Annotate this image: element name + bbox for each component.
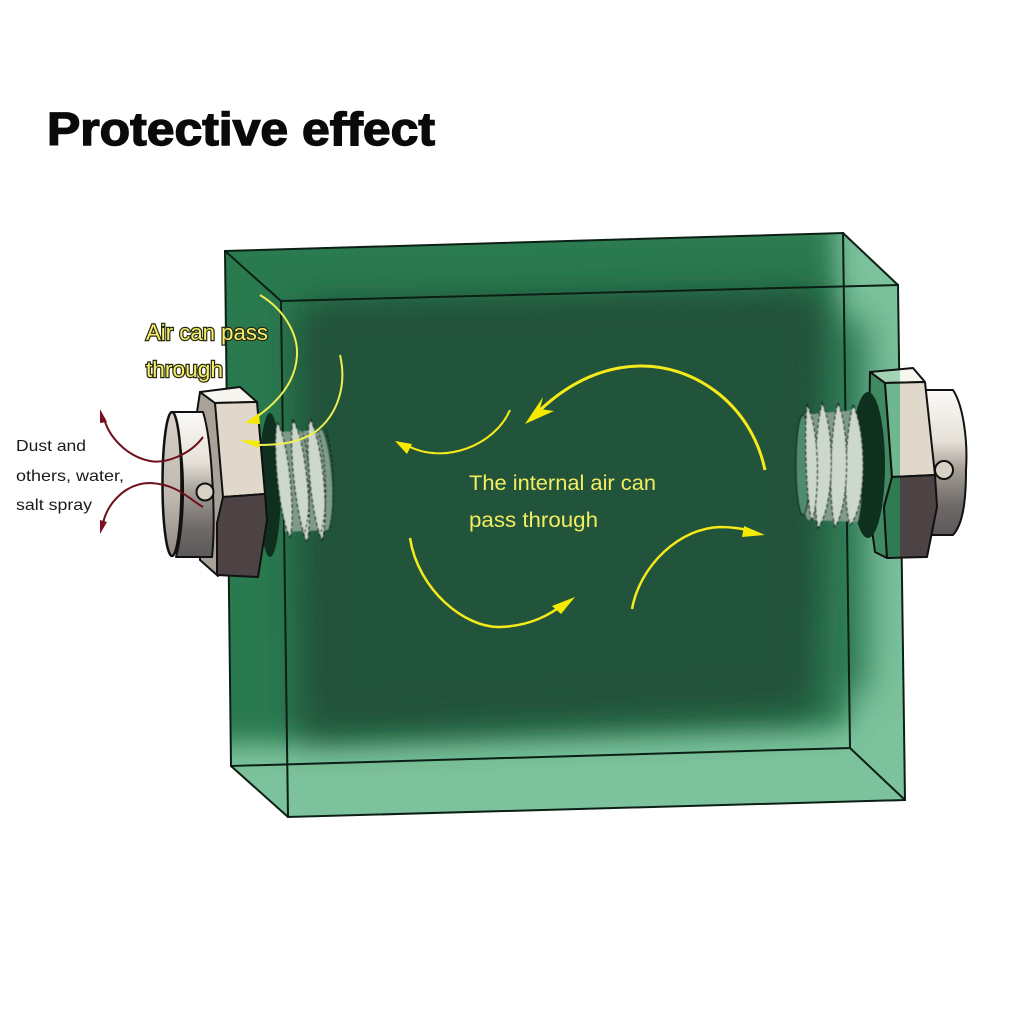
left vent hole xyxy=(196,484,214,500)
upper inflow arrow xyxy=(245,295,297,424)
label: internal air xyxy=(469,472,656,532)
upper red arrow xyxy=(100,409,203,462)
panel: translucent green enclosure xyxy=(224,232,906,818)
box edges xyxy=(225,233,905,817)
left cap front face xyxy=(162,412,182,556)
left O-ring xyxy=(259,413,281,557)
yellow internal airflow arrows xyxy=(395,366,765,627)
left thread xyxy=(275,419,333,543)
right hex dark face xyxy=(900,474,938,559)
left cap body xyxy=(172,412,214,557)
title: Protective effect xyxy=(47,103,435,155)
label: dust and others xyxy=(16,438,124,514)
label: dust and others: Dust and xyxy=(16,438,86,455)
right hex light face xyxy=(900,381,935,476)
label: air can pass through xyxy=(146,320,268,382)
lower red arrow xyxy=(100,483,203,534)
label: air can pass through: Air can pass xyxy=(146,320,268,345)
right thread opening xyxy=(796,415,810,515)
right O-ring xyxy=(851,392,885,538)
red outflow arrows xyxy=(100,409,203,534)
left hex light face xyxy=(215,402,265,497)
label: internal air: pass through xyxy=(469,509,598,532)
right nut inside box xyxy=(868,368,900,559)
lower arrow xyxy=(410,538,575,627)
right hex top face xyxy=(900,367,926,382)
left breather plug xyxy=(162,387,267,577)
left hex back sliver xyxy=(197,392,226,576)
yellow inflow arrows at left plug xyxy=(240,295,342,448)
small upper arrow xyxy=(395,410,510,454)
label: dust and others: salt spray xyxy=(16,497,92,514)
label: internal air: The internal air can xyxy=(469,472,656,495)
label: dust and others: others, water, xyxy=(16,468,124,485)
right cap body xyxy=(925,390,966,535)
right thread xyxy=(796,403,863,528)
left hex top face xyxy=(200,387,257,403)
label: air can pass through: through xyxy=(146,357,223,382)
lower inflow arrow xyxy=(240,355,342,448)
large top arrow xyxy=(525,366,765,470)
right breather plug xyxy=(900,367,968,559)
right arrow xyxy=(632,526,765,609)
left hex dark face xyxy=(217,494,267,577)
right vent hole xyxy=(935,461,953,479)
